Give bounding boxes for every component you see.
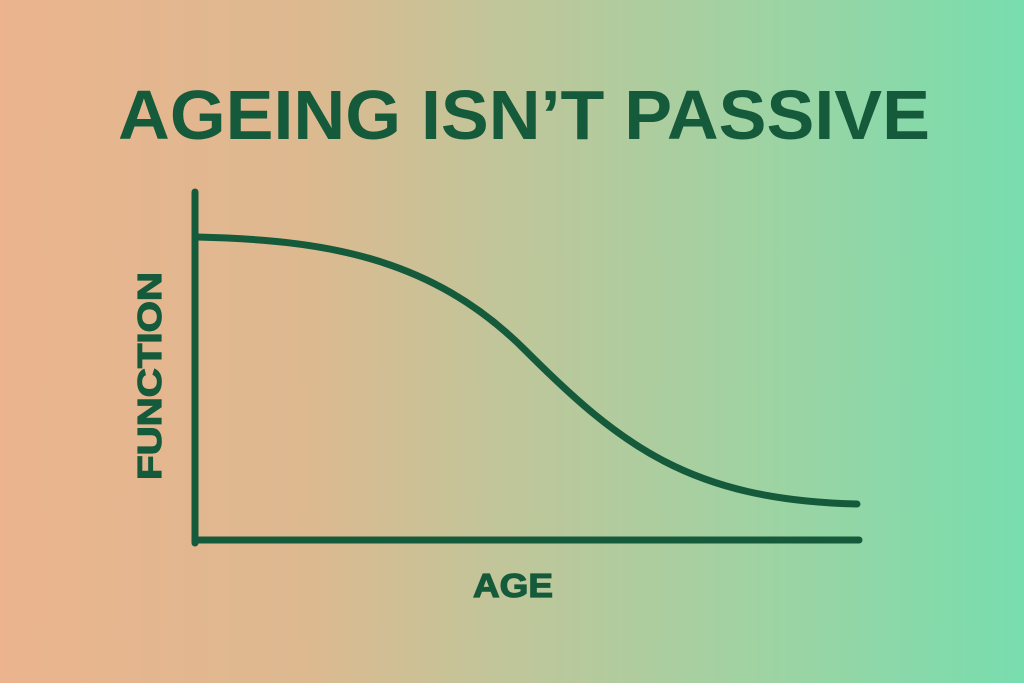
decline curve [197,237,857,504]
y axis label: FUNCTION [131,272,168,480]
y axis [192,192,198,543]
title: AGEING ISN’T PASSIVE [118,76,930,154]
x axis label: AGE [473,567,553,604]
x axis [195,536,859,544]
chart: function vs age [131,192,859,604]
